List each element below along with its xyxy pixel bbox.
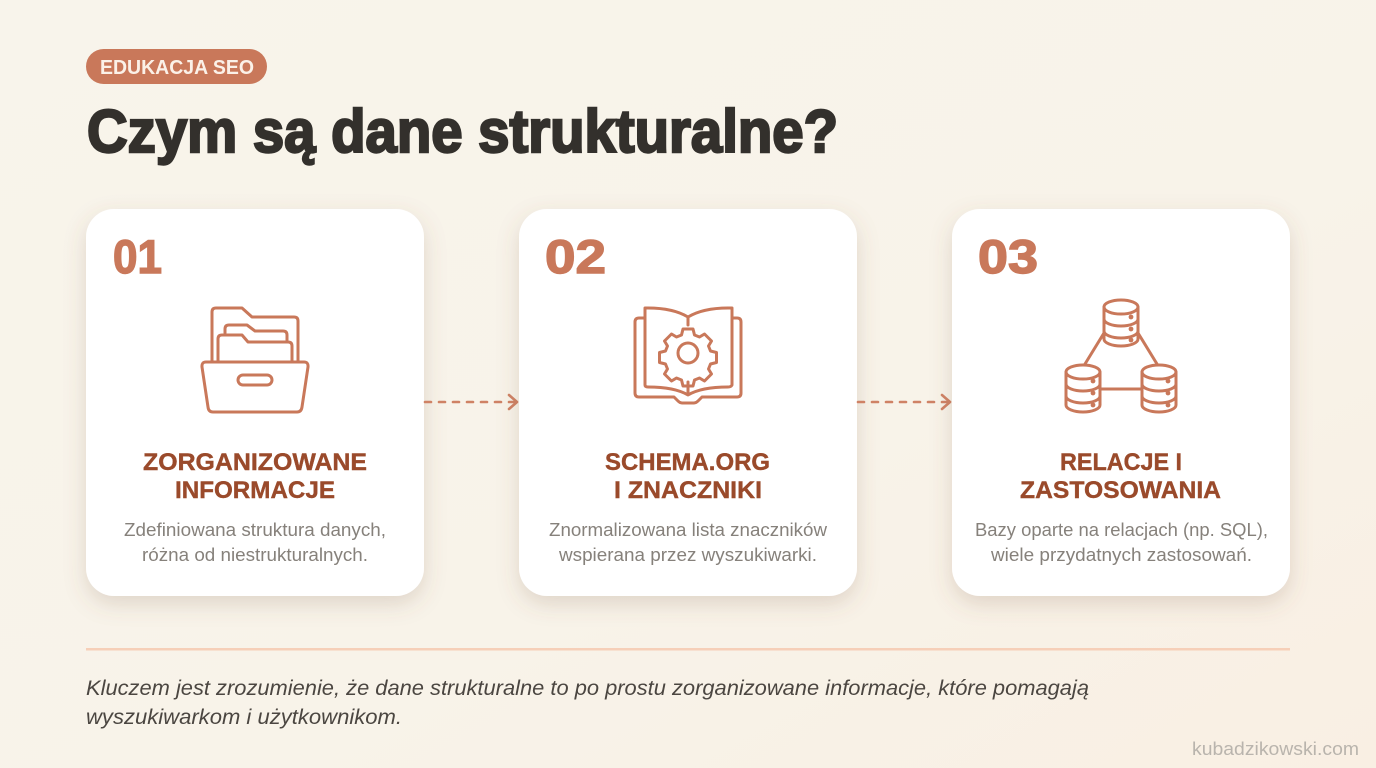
- arrow: step 2 to step 3: [858, 395, 950, 409]
- description: Znormalizowana lista znaczników: [549, 520, 828, 540]
- heading: [143, 449, 367, 504]
- badge: Edukacja SEO: [86, 49, 267, 84]
- heading: SCHEMA.ORG: [605, 449, 770, 476]
- closing statement: [86, 677, 1089, 729]
- panel: schema.org i znaczniki: [519, 209, 857, 596]
- heading: ZORGANIZOWANE: [143, 449, 367, 476]
- title: Czym są dane strukturalne?: [87, 98, 838, 165]
- icon: folders in drawer: [202, 308, 308, 412]
- heading: I ZNACZNIKI: [614, 477, 762, 504]
- heading: ZASTOSOWANIA: [1020, 477, 1221, 504]
- closing statement: Kluczem jest zrozumienie, że dane strukturalne to po prostu zorganizowane informacje, które pomagają: [86, 677, 1089, 700]
- closing statement: wyszukiwarkom i użytkownikom.: [86, 706, 402, 729]
- heading: [1020, 449, 1221, 504]
- arrow: step 1 to step 2: [425, 395, 517, 409]
- icon: book with gear: [635, 308, 741, 403]
- icon: connected databases: [1066, 300, 1176, 412]
- badge: Edukacja SEO: EDUKACJA SEO: [100, 57, 254, 79]
- number 02: 02: [545, 230, 606, 283]
- description: wspierana przez wyszukiwarki.: [558, 545, 817, 565]
- description: [124, 520, 386, 565]
- heading: [605, 449, 770, 504]
- description: [975, 520, 1268, 565]
- description: [549, 520, 828, 565]
- description: wiele przydatnych zastosowań.: [990, 545, 1252, 565]
- watermark: kubadzikowski.com: [1192, 739, 1359, 759]
- heading: INFORMACJE: [175, 477, 335, 504]
- description: Bazy oparte na relacjach (np. SQL),: [975, 520, 1268, 540]
- heading: RELACJE I: [1060, 449, 1182, 476]
- description: Zdefiniowana struktura danych,: [124, 520, 386, 540]
- number 03: 03: [978, 230, 1038, 283]
- panel: relacje i zastosowania: [952, 209, 1290, 596]
- panel: zorganizowane informacje: [86, 209, 424, 596]
- description: różna od niestrukturalnych.: [142, 545, 368, 565]
- number 01: 01: [113, 230, 162, 283]
